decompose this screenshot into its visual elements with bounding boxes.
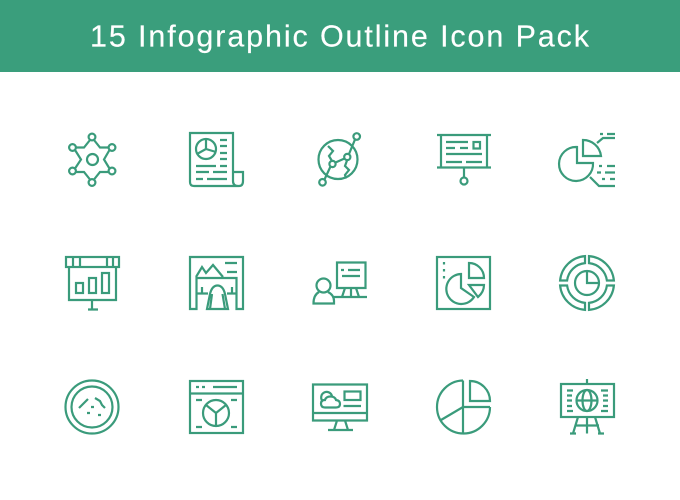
icon: pie chart xyxy=(437,380,490,434)
icon: report document xyxy=(190,133,243,186)
icon: easel with globe xyxy=(561,379,614,434)
icon: presentation board with bar chart xyxy=(66,257,119,310)
icon: exploded pie chart with labels xyxy=(559,134,615,186)
title: 15 Infographic Outline Icon Pack xyxy=(90,20,590,54)
icon: projector screen xyxy=(437,135,491,184)
icon: sheriff star network xyxy=(69,134,115,186)
icon: globe with connected nodes xyxy=(318,133,360,186)
icon: circular segmented target xyxy=(560,256,614,310)
icon: browser window with pie chart xyxy=(190,381,243,433)
icon: desktop monitor with cloud xyxy=(313,384,367,430)
header banner xyxy=(0,0,680,72)
icon: person at computer xyxy=(314,262,367,304)
icon: landscape billboard with tunnel xyxy=(190,257,243,309)
icon: framed pie chart xyxy=(437,257,490,309)
icon: round dish with dots xyxy=(66,380,118,434)
